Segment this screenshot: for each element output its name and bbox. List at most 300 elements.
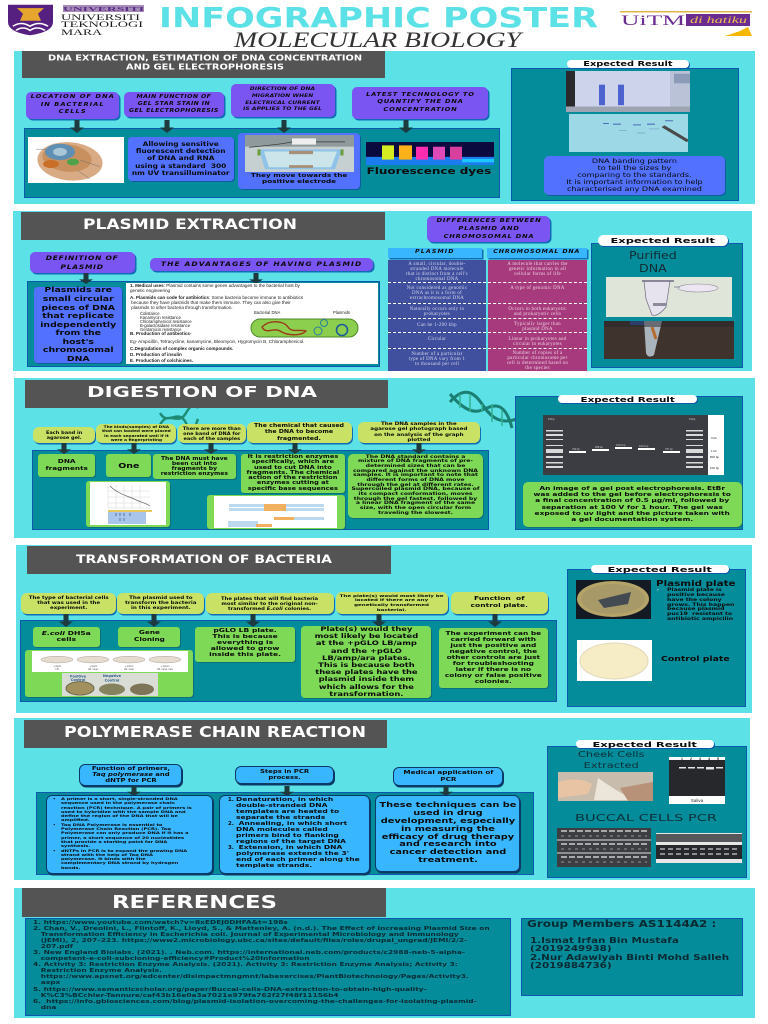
text: medical application: treatment.	[418, 856, 477, 864]
image: plasmid plate	[576, 580, 651, 619]
label: function of control plate: control plate.	[471, 603, 528, 609]
panel: DNA extraction	[14, 51, 755, 204]
label: location of DNA: LOCATION OF DNA	[30, 94, 115, 100]
pill: expected result	[598, 235, 728, 246]
text: PCR steps: DNA molecules called	[236, 827, 328, 833]
text: DNA standard: through the gel fastest, followed by	[354, 497, 477, 502]
text: cheek cells extracted	[578, 750, 644, 770]
panel: digestion answers	[32, 450, 489, 530]
card: plasmid advantages: Gentamicin resistance	[140, 327, 181, 332]
text: restriction enzymes	[241, 454, 345, 493]
text: DNA must have been cut	[153, 454, 236, 479]
text: reference list: K%C3%BCchler-Tannure/caf43b16e0a3a7021e979fa762f27f48f11156b4	[41, 993, 339, 999]
image: PCR gel left	[557, 828, 651, 867]
panel: plasmid extraction	[13, 211, 752, 371]
panel: transformation answers	[20, 620, 557, 702]
text: DNA standard: determined sizes that can be	[366, 464, 465, 469]
label: latest technology	[352, 87, 488, 119]
text: restriction enzymes: action of the restriction	[248, 475, 338, 481]
table column: plasmid: A small, circular, double-	[408, 262, 466, 267]
label: steps in PCR: Steps in PCR	[260, 768, 309, 774]
label: plasmid used: in this experiment.	[131, 605, 190, 610]
label: function of control plate	[451, 592, 548, 614]
table column: plasmid: to thousand per cell	[415, 362, 459, 367]
label: plasmid used: transform the bacteria	[125, 600, 196, 605]
label: differences: CHROMOSOMAL DNA	[443, 234, 534, 240]
arrow	[147, 614, 161, 627]
image: saliva gel: Saliva	[691, 798, 704, 803]
card: plasmid advantages	[126, 283, 378, 364]
table column: chromosomal DNA: A molecule that carries the	[507, 262, 568, 267]
text: plates location: transformation.	[329, 691, 403, 698]
text: primers explanation: that provide a starting point for DNA	[61, 839, 167, 844]
image: fluorescence dyes	[366, 142, 494, 165]
text: DNA standard: traveling the slowest.	[378, 511, 453, 516]
label: more than one band: one band of DNA for	[183, 431, 241, 436]
text: primers explanation: used to hybridize with the sample DNA and	[61, 809, 186, 814]
label: direction of migration: IS APPLIES TO THE GEL	[244, 107, 322, 112]
heading: DNA extraction: AND GEL ELECTROPHORESIS	[126, 62, 284, 72]
text: antibiotic ampicilin	[667, 617, 733, 622]
text: reference list: 5. https://www.semanticscholar.org/paper/Buccal-cells-DNA-extraction-to-obtain-high-quality-	[33, 987, 427, 993]
table column: plasmid: stranded DNA molecule	[410, 267, 464, 272]
text: gel star answer: Allowing sensitive	[143, 141, 219, 148]
card: plasmid advantages: Chloramphenicol resistance	[140, 319, 192, 324]
label: plates similar: The plates that will find bacteria	[221, 596, 319, 601]
card: plate images	[25, 650, 193, 697]
image: gel electrophoresis: 100 bp	[710, 466, 720, 470]
text: restriction enzymes: enzymes cutting at	[257, 480, 329, 486]
arrow	[59, 614, 73, 627]
table column: chromosomal DNA: genetic information in all	[509, 267, 566, 272]
card: migration direction: positive electrode	[262, 179, 336, 185]
heading: DNA extraction	[22, 51, 385, 78]
table column: plasmid	[388, 260, 486, 371]
label: plates similar	[206, 593, 334, 614]
text: plasmid definition: Plasmids are	[44, 285, 112, 294]
label: more than one band	[178, 424, 246, 443]
label: medical application: Medical application of	[403, 770, 493, 776]
heading: transformation of bacteria	[27, 546, 391, 574]
label: plates similar: transformed E.coli colonies.	[228, 606, 312, 611]
card: migration direction: They move towards the	[251, 173, 347, 179]
image: gel electrophoresis: 757 bp	[665, 447, 673, 451]
text: reference list: (JEMI), 2, 207–223. https://www2.microbiology.ubc.ca/sites/default/files/roles/drupal_ungrad/JEMI/2/2-	[41, 938, 467, 944]
text: one	[106, 454, 151, 477]
logo: UiTM di hatiku: UiTM	[621, 13, 685, 29]
text: control plate function	[439, 628, 548, 688]
table column: chromosomal DNA: Number of copies of a	[512, 351, 563, 356]
header: chromosomal column: CHROMOSOMAL DNA	[494, 249, 580, 255]
text: control plate function: just the positive and	[451, 643, 536, 649]
text: control plate function: for troubleshooting	[453, 661, 534, 667]
label: location of DNA: CELLS	[58, 109, 86, 115]
image: saliva gel: 4	[708, 757, 710, 761]
label: latest technology: CONCENTRATION	[383, 107, 457, 113]
text: plasmid definition: independently	[40, 320, 116, 329]
arrow	[399, 120, 413, 133]
header: chromosomal column	[487, 248, 587, 258]
text: reference list: Restriction Enzyme Analysis.	[41, 968, 162, 974]
table column: chromosomal DNA: cell is determined based on	[507, 361, 568, 366]
text: plates location	[301, 626, 431, 698]
label: direction of migration: DIRECTION OF DNA	[250, 87, 316, 92]
text: primers explanation: primer, a short sequence of 20 nucleotides	[61, 835, 184, 840]
text: plasmid plate	[656, 579, 736, 622]
text: plasmid definition: that replicate	[42, 311, 114, 320]
card: plate images: + pGLO	[125, 665, 134, 668]
text: reference list: dna	[41, 1005, 56, 1011]
pill: expected result: Expected Result	[583, 60, 673, 68]
text: primers explanation: reaction (PCR) technique. A pair of primers is	[61, 805, 192, 810]
text: plates location: most likely be located	[314, 633, 418, 640]
icon: DNA helix small	[159, 408, 199, 424]
text: primers explanation: define the region of the DNA that will be	[61, 813, 178, 818]
text: fluorescence dyes: Fluorescence dyes	[366, 166, 491, 176]
label: DNA samples: agarose gel photograph based	[370, 427, 468, 432]
arrow	[70, 120, 84, 133]
text: reference list: 4. Activity 3: Restriction Enzyme Analysis. (2021). Activity 3: Restriction Enzyme Analysis; Activity 3:	[33, 962, 458, 968]
text: plates location: plasmid inside them	[318, 676, 414, 683]
heading: references	[22, 888, 386, 917]
label: function of primers: dNTP for PCR	[105, 778, 156, 784]
logo: Universiti Teknologi Mara wordmark: TEKNOLOGI	[61, 19, 143, 29]
image: gel electrophoresis: 769 bp	[572, 447, 580, 451]
card: plate images: LB / amp / ara	[157, 668, 173, 671]
card: plasmid advantages: 1. Medical uses: Plasmid contains some genes advantages to the bacterial host by	[130, 283, 300, 288]
text: plates location: and the +pGLO	[331, 648, 401, 655]
label: latest technology: LATEST TECHNOLOGY TO	[366, 92, 474, 98]
image: saliva gel: 1	[681, 757, 683, 761]
pill: expected result: Expected Result	[580, 394, 675, 404]
arrow	[288, 443, 302, 454]
text: E. coli: cells	[57, 637, 76, 643]
arrow	[79, 273, 93, 284]
arrow	[127, 443, 141, 454]
card: plasmid advantages: genetic engineering	[130, 288, 170, 293]
text: PCR steps: template strands.	[236, 863, 312, 869]
image: gel electrophoresis: 1512 bp	[616, 443, 626, 447]
label: differences: PLASMID AND	[458, 226, 519, 232]
panel: PCR answers	[36, 792, 534, 875]
label: gel star stain: GEL STAR STAIN IN	[138, 101, 210, 107]
text: plasmid plate: because plasmid	[667, 607, 725, 612]
text: one: One	[118, 462, 139, 470]
heading: plasmid extraction: PLASMID EXTRACTION	[83, 217, 297, 233]
text: DNA standard: compared against the unknown DNA	[353, 469, 478, 474]
table column: plasmid: extrachromosomal DNA	[410, 296, 464, 301]
text: pGLO LB plate: pGLO LB plate.	[213, 628, 277, 634]
text: plasmid plate: Plasmid plate	[656, 579, 736, 588]
text: PCR steps: polymerase extends the 3'	[236, 851, 349, 857]
panel: references	[14, 888, 755, 1018]
label: plates transformed: located if there are any	[355, 597, 429, 602]
label: chemical: The chemical that caused	[254, 423, 345, 429]
card: plate images: LB / amp	[124, 668, 135, 671]
label: steps in PCR: process.	[268, 775, 301, 781]
text: primers explanation: bonds.	[61, 865, 80, 870]
label: plates similar: most similar to the original non-	[222, 601, 318, 606]
text: E. coli: E.coli DH5a	[42, 631, 91, 637]
text: cheek cells extracted: Extracted	[583, 761, 639, 770]
text: DNA must have been cut: restriction enzymes	[161, 470, 228, 476]
pill: expected result: Expected Result	[593, 740, 697, 748]
text: plates location: at the +pGLO LB/amp	[316, 640, 416, 647]
label: plates transformed: genetically transformed	[355, 602, 429, 607]
label: differences: DIFFERENCES BETWEEN	[436, 218, 541, 224]
text: medical application: and research into	[399, 840, 496, 848]
card: plate images: - pGLO	[53, 665, 61, 668]
heading: references: REFERENCES	[112, 892, 277, 913]
text: PCR steps: 2.	[228, 821, 234, 827]
text: DNA banding pattern: comparing to the standards.	[577, 172, 692, 179]
panel: group members: 1.Ismat Irfan Bin Mustafa	[530, 936, 679, 945]
text: restriction enzymes: specifically, which are	[252, 459, 334, 465]
panel: expected result 3	[515, 396, 743, 530]
panel: group members: 2.Nur Adawiyah Binti Mohd Salleh	[530, 953, 729, 962]
text: reference list: 6. https://info.gbiosciences.com/blog/plasmid-isolation-overcoming-the-challenges-for-isolating-plasmid-	[33, 999, 477, 1005]
text: gene cloning: Gene	[138, 630, 160, 636]
text: primers explanation: •	[53, 796, 56, 801]
label: definition of plasmid	[30, 252, 135, 273]
label: gel star stain	[124, 92, 224, 117]
image: gel electrophoresis: 8 kbp	[689, 417, 696, 421]
image: purified DNA tube in hand	[604, 321, 734, 359]
text: control plate function: negative control, the	[450, 649, 537, 655]
panel: plasmid answers	[27, 281, 380, 367]
label: type of bacterial cells: The type of bacterial cells	[29, 595, 108, 600]
label: plates transformed: bacterial.	[377, 607, 407, 612]
text: primers explanation: synthesis.	[61, 843, 90, 848]
logo: Universiti Teknologi Mara wordmark: UNIVERSITI	[61, 12, 140, 22]
text: gel caption: was added to the gel before electrophoresis to	[534, 492, 731, 498]
text: plasmid plate: grows. This happen	[667, 603, 734, 608]
arrow	[439, 786, 453, 796]
text: plates location: which allows for the	[318, 684, 414, 691]
image: gel electrophoresis: 908 bp	[595, 445, 603, 449]
label: DNA samples: plotted	[407, 438, 431, 443]
text: medical application: in measuring the	[401, 825, 494, 833]
card: plate images: Control	[71, 678, 85, 682]
label: plates transformed: The plate(s) would most likely be	[340, 593, 444, 598]
text: PCR steps: 3.	[228, 845, 234, 851]
label: medical application: PCR	[440, 776, 456, 782]
label: gel star stain: GEL ELECTROPHORESIS	[129, 108, 219, 114]
image: saliva gel: 5	[717, 757, 719, 761]
card: plasmid advantages: C.Degradation of complex organic compounds.	[130, 346, 233, 350]
text: PCR steps: 1.	[228, 797, 234, 803]
text: plasmid definition: chromosomal	[43, 345, 113, 354]
image: gel electrophoresis: 8 kbp	[548, 417, 555, 421]
heading: plasmid extraction	[21, 212, 385, 240]
pill: expected result	[591, 565, 729, 573]
image: PCR gel right	[656, 833, 742, 863]
label: direction of migration: MIGRATION WHEN	[252, 94, 314, 99]
icon: bacterium with plasmids	[250, 318, 358, 338]
panel: digestion of DNA	[14, 378, 755, 538]
label: medical application	[393, 767, 503, 786]
label: kinds of samples: that can loaded were placed	[102, 429, 170, 433]
label: each band	[33, 427, 95, 443]
text: plasmid definition	[34, 287, 122, 363]
label: gel star stain: MAIN FUNCTION OF	[137, 94, 211, 100]
text: gel star answer: using a standard 300	[135, 163, 227, 170]
text: DNA banding pattern: It is important information to help	[566, 179, 703, 186]
text: gene cloning	[118, 627, 180, 647]
label: chemical	[247, 422, 352, 443]
text: DNA standard	[348, 454, 483, 518]
icon: DNA helix large	[449, 390, 515, 428]
table column: plasmid: that is distinct from a cell's	[406, 272, 468, 277]
text: gel star answer: fluorescent detection	[136, 148, 226, 155]
card: plate images: LB / amp	[88, 668, 99, 671]
label: kinds of samples: in each separated well if it	[104, 434, 168, 438]
arrow	[57, 443, 71, 454]
pill: expected result: Expected Result	[608, 564, 712, 574]
label: type of bacterial cells	[21, 593, 116, 614]
label: definition of plasmid: PLASMID	[61, 264, 104, 270]
arrow	[160, 120, 174, 133]
heading: polymerase chain reaction	[24, 720, 387, 748]
label: kinds of samples	[96, 424, 176, 443]
arrow	[280, 786, 294, 796]
text: reference list: https://www.apsnet.org/edcenter/disimpactmngmnt/labexercises/PlantBiotechnology/Pages/Activity3.	[41, 974, 469, 980]
text: DNA fragments	[38, 454, 95, 477]
panel: transformation of bacteria	[16, 545, 752, 713]
table column: chromosomal DNA: plasmid DNA	[522, 327, 553, 332]
table column: chromosomal DNA: circular in eukaryotes	[513, 342, 562, 347]
card: plasmid advantages: Bacterial DNA	[254, 310, 280, 315]
label: steps in PCR	[235, 766, 334, 784]
text: primers explanation	[46, 795, 213, 874]
text: pGLO LB plate: allowed to grow	[211, 646, 279, 652]
text: DNA banding pattern	[544, 156, 725, 195]
card: plasmid advantages: B. Production of antibiotics-	[130, 331, 192, 336]
label: kinds of samples: The kinds(samples) of DNA	[103, 425, 169, 429]
label: each band: agarose gel.	[46, 435, 82, 440]
text: plasmid definition: small circular	[43, 294, 113, 303]
label: plasmid used	[117, 593, 204, 614]
image: cheek swab	[558, 772, 653, 801]
image: gel photo	[566, 71, 690, 112]
text: gene cloning: Cloning	[134, 637, 164, 643]
panel: group members: (2019884736)	[530, 961, 612, 970]
table column: plasmid: chromosomal DNA	[416, 277, 458, 282]
text: DNA standard: Supercoiled plasmid DNA, because of	[351, 487, 480, 492]
label: type of bacterial cells: experiment.	[50, 605, 87, 610]
text: PCR steps: double-stranded DNA	[236, 803, 327, 809]
panel: expected result 2	[591, 243, 743, 368]
card: plasmid advantages: D. Production of insulin	[130, 352, 182, 357]
text: PCR steps: templates are heated to	[236, 809, 339, 815]
text: plasmid definition: from the	[55, 328, 101, 337]
text: plates location: LB/amp/ara plates.	[322, 655, 410, 662]
arrow	[127, 786, 141, 796]
text: medical application: used in drug	[413, 809, 482, 817]
image: gel electrophoresis: 3 kb	[711, 436, 717, 440]
label: advantages of plasmid: THE ADVANTAGES OF HAVING PLASMID	[161, 261, 362, 268]
text: PCR steps: Extension, in which DNA	[239, 845, 342, 851]
text: primers explanation: amplified.	[61, 817, 90, 822]
image: control plate	[577, 640, 652, 681]
logo: Universiti Teknologi Mara wordmark: MARA	[61, 27, 103, 37]
pill: expected result: Expected Result	[611, 236, 715, 245]
text: restriction enzymes: specific base sequences	[248, 486, 338, 492]
chart: restriction enzyme cutting	[207, 495, 345, 529]
text: control plate function: other controls are just	[447, 655, 540, 661]
text: reference list: 207.pdf	[41, 944, 73, 950]
text: plates location: This is because both	[318, 662, 414, 669]
text: reference list: Transformation Efficiency in Escherichia coli. Journal of Experimental Microbiology and Immunology	[41, 932, 459, 938]
text: DNA standard: samples. It is important to note that	[353, 473, 478, 478]
header: plasmid column	[388, 248, 482, 258]
text: reference list	[25, 918, 511, 1016]
text: reference list: competent-e-coli-subcloning-efficiency#Product%20Information	[41, 956, 310, 962]
text: DNA standard: a linear DNA fragment of the same	[356, 501, 475, 506]
heading: DNA extraction: DNA EXTRACTION, ESTIMATION OF DNA CONCENTRATION	[48, 54, 362, 62]
text: control plate function: The experiment can be	[446, 631, 541, 637]
label: kinds of samples: were a fingerprinting	[110, 438, 162, 442]
text: gel star answer	[128, 137, 234, 181]
text: DNA standard: its compact conformation, moves	[358, 492, 473, 497]
image: saliva gel: 2	[690, 757, 692, 761]
pill: expected result	[576, 740, 714, 748]
text: control plate function: colonies.	[475, 679, 512, 685]
text: PCR steps: primers bind to flanking	[236, 833, 339, 839]
arrow	[372, 614, 386, 627]
text: restriction enzymes: used to cut DNA into	[254, 465, 332, 471]
label: latest technology: QUANTIFY THE DNA	[377, 99, 463, 105]
arrow	[488, 614, 502, 627]
text: medical application: efficacy of drug therapy	[381, 832, 514, 840]
card: migration direction	[238, 133, 360, 189]
card: plasmid advantages: E. Production of colchicines.	[130, 358, 193, 363]
text: primers explanation: Polymerase can only produce DNA if it has a	[61, 830, 189, 835]
text: reference list: aspx	[41, 980, 60, 986]
text: DNA standard: size, with the open circular form	[360, 506, 471, 511]
text: medical application	[375, 795, 520, 872]
image: gel bands under light	[569, 114, 688, 152]
label: function of primers: Function of primers,	[91, 766, 170, 772]
label: chemical: the DNA to become	[265, 429, 334, 435]
heading: transformation of bacteria: TRANSFORMATION OF BACTERIA	[76, 552, 332, 566]
panel: group members	[521, 918, 743, 996]
heading: digestion of DNA: DIGESTION OF DNA	[87, 383, 318, 401]
text: gel star answer: of DNA and RNA	[147, 155, 215, 162]
card: plasmid advantages: Plasmids	[333, 310, 350, 315]
logo: Universiti Teknologi Mara wordmark: UNIVERSITI	[63, 6, 145, 13]
text: plasmid definition: DNA	[67, 354, 89, 363]
text: control plate function: later if there is no	[456, 667, 531, 673]
table column: chromosomal DNA: particular chromosome per	[507, 356, 568, 361]
text: pGLO LB plate	[195, 627, 295, 662]
text: primers explanation: complementary DNA strand by hydrogen	[61, 860, 178, 865]
text: plasmid plate: positive because	[667, 593, 725, 598]
image: microfuge tube	[606, 277, 732, 317]
text: DNA banding pattern: characterised any DNA examined	[567, 186, 702, 193]
text: primers explanation: A primer is a short, single-stranded DNA	[61, 796, 178, 801]
text: buccal cells PCR: BUCCAL CELLS PCR	[575, 813, 718, 824]
text: reference list: 3. New England Biolabs. (2021). . Neb.com. https://international.neb.com/products/c2988-neb-5-alpha-	[33, 950, 465, 956]
text: plasmid plate: -	[657, 588, 659, 593]
text: DNA must have been cut: fragments by	[172, 466, 217, 472]
text: reference list: 1. https://www.youtube.com/watch?v=8xEDEJ0DHFA&t=198s	[33, 920, 288, 926]
table column: plasmid: Naturally occurs only in	[410, 307, 464, 312]
image: electrophoresis tank	[245, 135, 354, 172]
text: puc19 resistant to	[667, 612, 732, 617]
panel: DNA extraction answers	[24, 128, 500, 198]
table column: plasmid: Can be 1-200 kbp	[417, 323, 457, 328]
